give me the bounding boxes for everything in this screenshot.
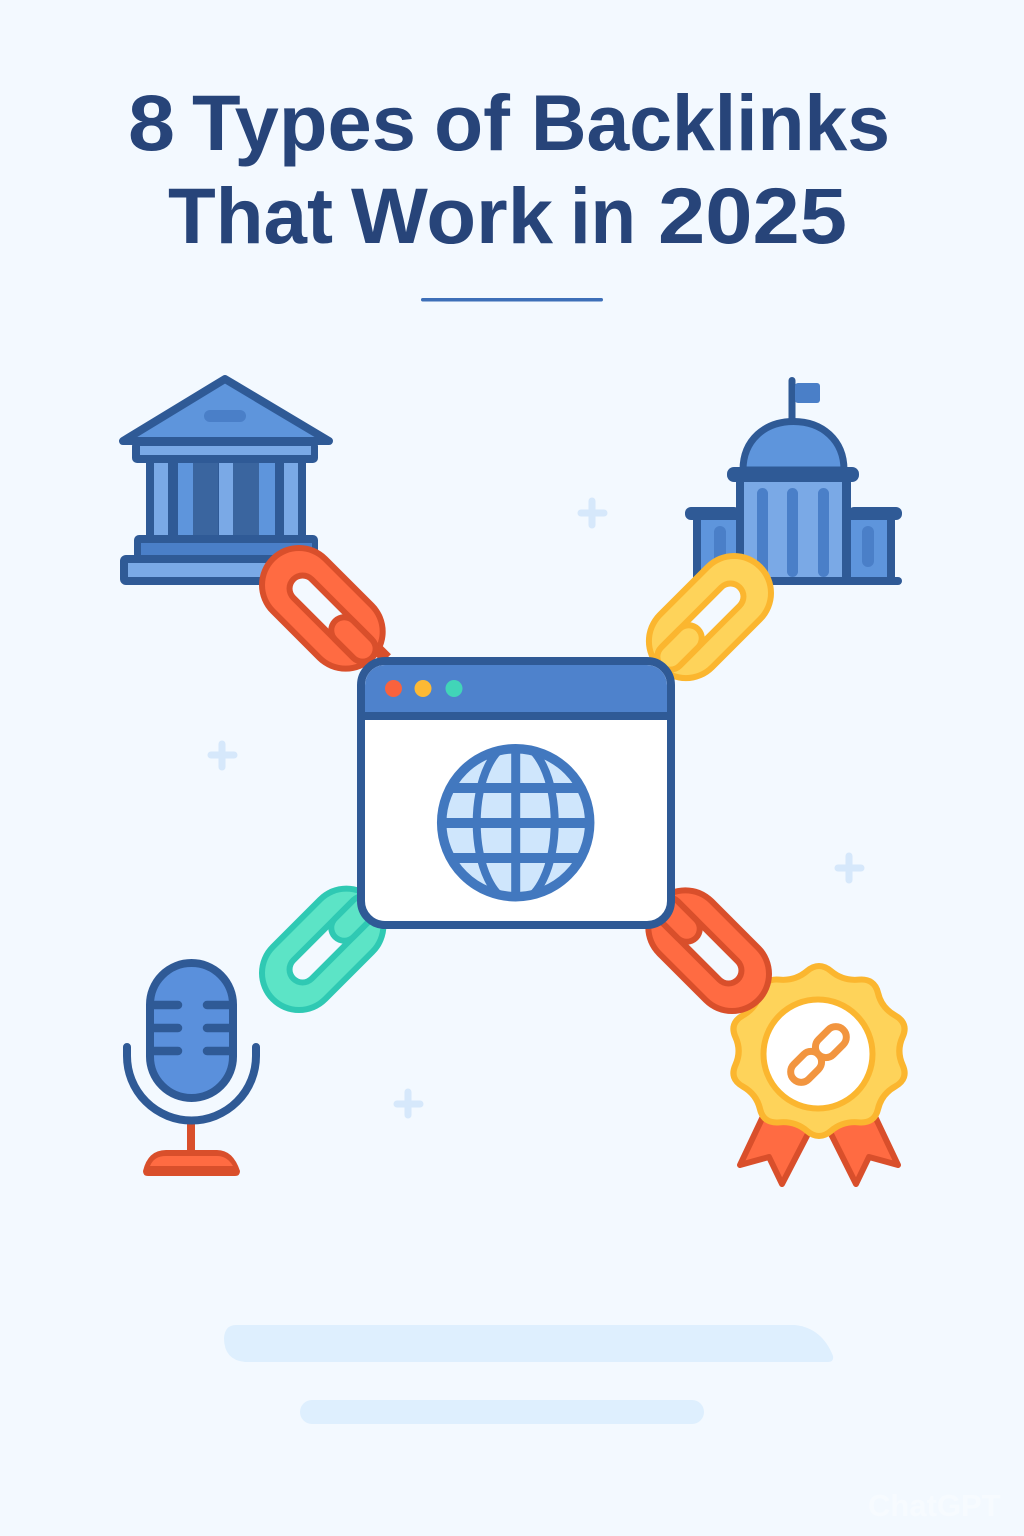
title: Types	[192, 78, 416, 167]
entablature	[132, 441, 318, 463]
icon: capitol building	[685, 377, 902, 585]
window title bar	[365, 665, 667, 712]
footer placeholder bar: upper	[224, 1325, 833, 1362]
title: Backlinks	[531, 78, 890, 167]
dome band	[727, 467, 859, 482]
central hall	[736, 478, 851, 581]
mic grille	[152, 1005, 232, 1051]
title	[128, 78, 890, 260]
right ribbon	[829, 1108, 898, 1184]
window dots	[385, 680, 462, 697]
mic stem	[187, 1122, 195, 1154]
title divider	[421, 298, 603, 302]
icon: award badge	[733, 966, 905, 1184]
chain link: bottom left green	[299, 909, 363, 973]
chain link: top left red	[299, 578, 387, 666]
icon: microphone	[127, 963, 256, 1176]
title: That	[168, 171, 333, 260]
ground line	[693, 577, 902, 585]
window frame	[361, 661, 671, 925]
dome	[743, 422, 844, 470]
browser window	[361, 661, 671, 925]
roof plaque	[204, 410, 246, 422]
icon: globe	[440, 743, 590, 903]
seal centre	[764, 1000, 872, 1108]
scalloped seal	[733, 966, 905, 1136]
title: in	[570, 171, 636, 260]
decorative plus signs	[211, 501, 861, 1115]
mic cradle	[127, 1047, 256, 1120]
icon: bank building	[120, 379, 329, 585]
upper step	[134, 535, 318, 561]
mic head	[150, 963, 233, 1098]
left wing	[685, 507, 740, 581]
bank roof	[123, 379, 329, 441]
chain link: bottom right red	[668, 910, 732, 974]
chain link: top right yellow	[670, 593, 734, 657]
right wing	[848, 507, 902, 581]
title: 8	[128, 78, 175, 167]
flag	[795, 383, 820, 403]
columns	[146, 460, 306, 538]
seal link glyph	[786, 1022, 851, 1087]
mic base	[143, 1150, 240, 1176]
title bar divider	[361, 712, 671, 720]
footer placeholder bar: lower	[300, 1400, 704, 1424]
title: Work	[351, 171, 554, 260]
title: of	[434, 78, 511, 167]
flag pole	[788, 377, 796, 423]
watermark: ChatGPT	[868, 1488, 1001, 1523]
infographic canvas	[119, 93, 908, 1424]
lower step	[120, 555, 318, 585]
title: 2025	[658, 171, 847, 260]
left ribbon	[740, 1108, 810, 1184]
